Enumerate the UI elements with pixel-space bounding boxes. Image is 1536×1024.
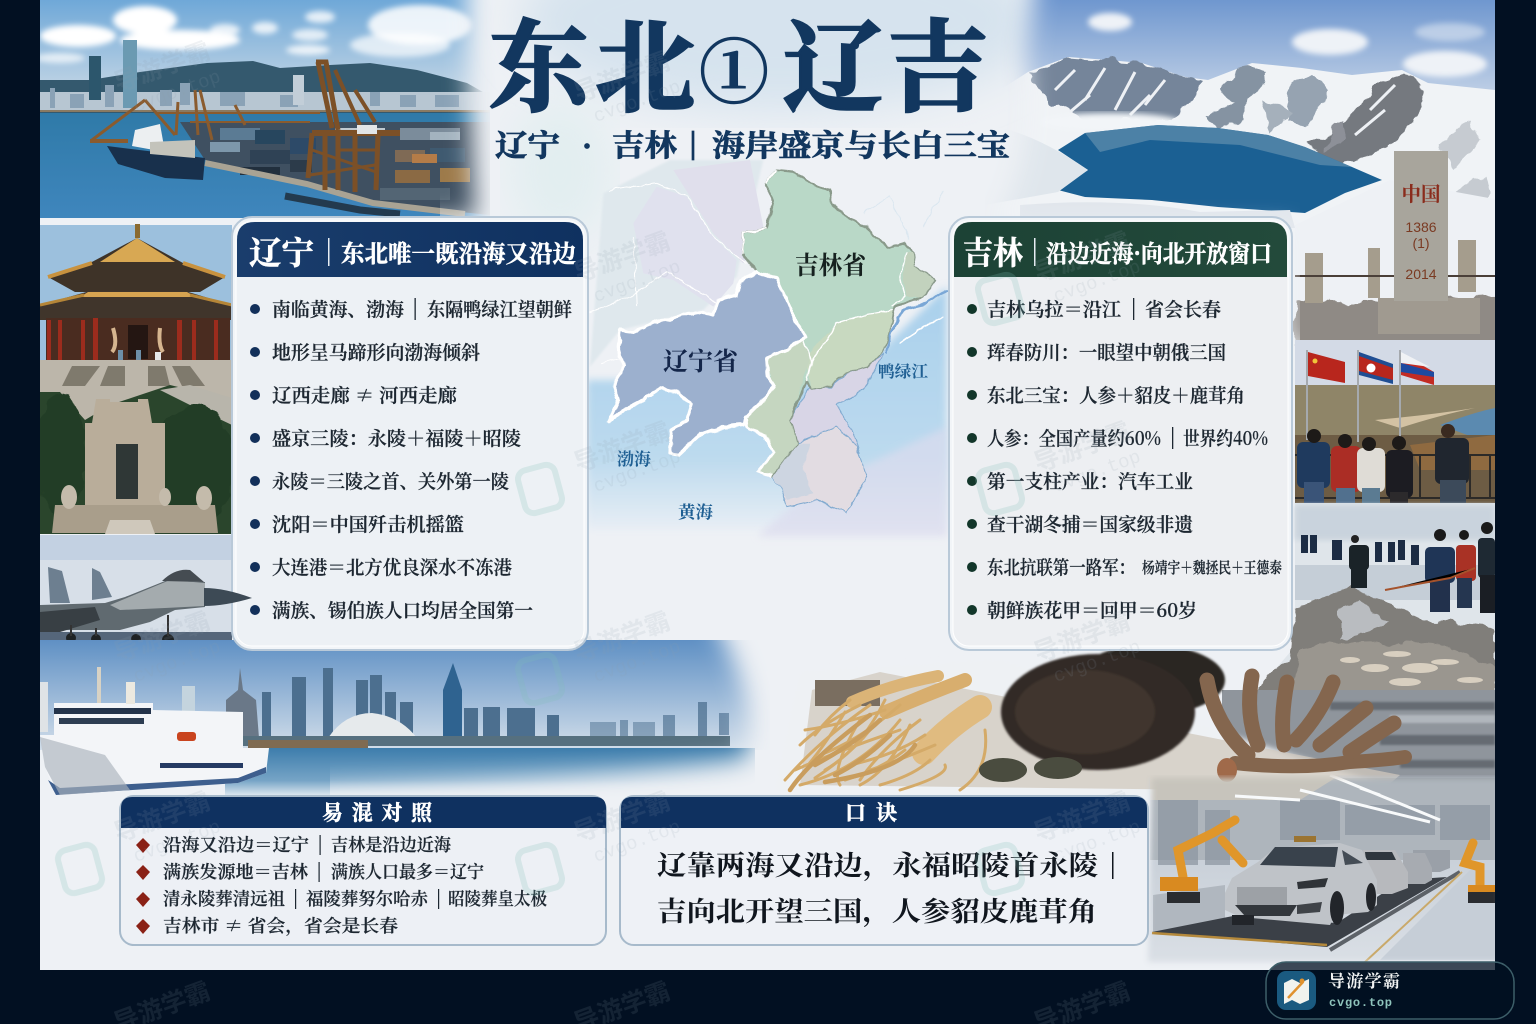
photo: automobile factory line [1140,775,1500,970]
subtitle [495,121,1010,165]
panel: mnemonic [620,796,1148,945]
title: ① [699,17,769,118]
list: Jilin facts: 朝鲜族花甲＝回甲＝60岁 [987,596,1197,623]
ship [107,146,205,180]
watermark pattern: 导游学霸 [570,227,674,288]
photo: Chagan Lake winter fishing [1258,502,1495,690]
list: Jilin facts: 吉林乌拉＝沿江 [987,295,1121,322]
watermark pattern: cvgo.top [130,636,224,688]
list: Jilin facts: 人参：全国产量约60% [987,424,1161,451]
icon: boundary stone China 1386: 2014 [1405,266,1437,282]
list: Jilin facts: 珲春防川：一眼望中朝俄三国 [987,338,1226,365]
watermark pattern: 导游学霸 [110,37,214,98]
list: easily confused items: 满族人口最多＝辽宁 [331,859,484,884]
icon: ginseng [785,676,986,790]
icon: boundary stone China 1386: 中国 [1402,178,1440,207]
list: easily confused items: 吉林市 ≠ 省会，省会是长春 [163,913,399,938]
footer badge [1266,962,1514,1019]
list: Jilin facts: 东北抗联第一路军： [987,553,1135,580]
cars [1413,850,1450,872]
watermark pattern: 导游学霸 [1030,417,1134,478]
jet nose overlapping panel [204,588,252,606]
panel: easily confused [120,796,606,945]
watermark pattern: cvgo.top [130,816,224,868]
list: easily confused items [136,832,547,938]
photo: factory overhead section [1222,690,1495,790]
icon: boundary stone China 1386: 1386 [1405,219,1437,235]
list: Liaoning facts: 沈阳＝中国歼击机摇篮 [272,510,464,537]
gantry crane [308,62,400,192]
header: easily confused [121,797,606,828]
watermark pattern: cvgo.top [590,76,684,128]
icon: boundary stone China 1386 [1394,151,1448,301]
map label: Yellow Sea: 黄海 [678,498,713,523]
header: Jilin: 沿边近海·向北开放窗口 [1046,234,1272,269]
map label: Yalu River: 鸭绿江 [878,359,928,382]
subtitle: 吉林 [612,121,677,165]
watermark pattern: 导游学霸 [110,607,214,668]
robot arms [1178,820,1480,887]
list: Liaoning facts: 东隔鸭绿江望朝鲜 [427,295,572,322]
Liaoning province [608,272,807,455]
icon: map logo [1277,971,1316,1010]
map label: Jilin: 吉林省 [795,246,867,282]
footer badge: cvgo.top [1329,996,1392,1010]
watermark pattern: 导游学霸 [110,787,214,848]
list: Jilin facts: 查干湖冬捕＝国家级非遗 [987,510,1193,537]
list: Liaoning facts [250,295,572,623]
watermark pattern: cvgo.top [590,816,684,868]
header: mnemonic [621,797,1147,828]
list: Liaoning facts: 盛京三陵：永陵＋福陵＋昭陵 [272,424,521,451]
watermark pattern: cvgo.top [590,636,684,688]
list: easily confused items: 吉林是沿边近海 [331,832,451,857]
list: Jilin facts: 东北三宝：人参＋貂皮＋鹿茸角 [987,381,1245,408]
photo: J-15 fighter jet [40,535,232,650]
map label: Bohai Sea: 渤海 [617,445,651,470]
list: Liaoning facts: 南临黄海、渤海 [272,295,404,322]
photo: snow mountain Changbai crater lake [985,0,1500,345]
header: easily confused: 易混对照 [322,797,434,827]
text: mnemonic verse: 吉向北开望三国，人参貂皮鹿茸角 [657,890,1097,929]
list: Liaoning facts: 永陵＝三陵之首、关外第一陵 [272,467,509,494]
Jilin province [742,170,935,477]
footer badge: 导游学霸 [1328,967,1400,992]
watermark pattern: cvgo.top [590,446,684,498]
icon: antler [1207,676,1405,766]
map: Liaoning and Jilin provinces [587,160,948,537]
photo: Dalian harbour and container port [35,0,500,218]
watermark pattern: 导游学霸 [570,607,674,668]
text: mnemonic verse: 辽靠两海又沿边，永福昭陵首永陵 [657,844,1098,883]
watermark pattern: 导游学霸 [1030,607,1134,668]
list: easily confused items: 清永陵葬清远祖 [163,886,285,911]
list: Jilin facts: 第一支柱产业：汽车工业 [987,467,1193,494]
watermark pattern: 导游学霸 [570,47,674,108]
photo: Hunchun three-nation viewpoint [1295,340,1495,514]
list: easily confused items: 昭陵葬皇太极 [448,886,547,911]
icon: flags [1307,350,1434,442]
ferry [40,703,269,784]
watermark pattern [56,37,1144,1024]
photo: Shenyang stone stele tomb [34,385,235,534]
photo: Dalian skyline ferry [30,640,770,798]
North Korea region [790,353,883,453]
icon: fur pelt [1001,645,1225,770]
watermark pattern: cvgo.top [590,256,684,308]
list: Liaoning facts: 大连港＝北方优良深水不冻港 [272,553,512,580]
header: Jilin: 吉林 [963,228,1023,274]
header: Liaoning: 东北唯一既沿海又沿边 [341,234,576,269]
people at railing [1297,424,1469,503]
panel: Jilin [949,217,1292,650]
list: Jilin facts: 世界约40% [1183,424,1268,451]
header: Jilin [954,222,1287,277]
list: Jilin facts: 杨靖宇＋魏拯民＋王德泰 [1142,556,1282,578]
list: easily confused items: 满族发源地＝吉林 [163,859,309,884]
list: Liaoning facts: 地形呈马蹄形向渤海倾斜 [272,338,480,365]
watermark pattern: 导游学霸 [1030,787,1134,848]
watermark pattern: 导游学霸 [570,787,674,848]
photo: northeast three treasures [775,645,1405,800]
text: mnemonic verse [657,844,1114,929]
header: mnemonic: 口诀 [845,797,897,827]
list: easily confused items: 沿海又沿边＝辽宁 [163,832,309,857]
South Korea region [772,427,867,513]
header: Liaoning: 辽宁 [249,228,314,274]
header: Liaoning [237,222,583,277]
subtitle: 辽宁 [495,121,560,165]
photo: Zhaoling palace pavilion [40,224,232,425]
watermark pattern: cvgo.top [1050,636,1144,688]
list: Jilin facts: 省会长春 [1145,295,1221,322]
watermark pattern: 导游学霸 [570,417,674,478]
watermark pattern: cvgo.top [1050,446,1144,498]
list: Liaoning facts: 辽西走廊 ≠ 河西走廊 [272,381,457,408]
icon: boundary stone China 1386: (1) [1412,235,1430,251]
subtitle: 海岸盛京与长白三宝 [712,121,1010,165]
list: Jilin facts [967,295,1282,623]
panel: Liaoning [232,217,588,650]
list: Liaoning facts: 满族、锡伯族人口均居全国第一 [272,596,533,623]
map label: Liaoning: 辽宁省 [663,342,739,378]
watermark pattern: cvgo.top [130,66,224,118]
watermark pattern: cvgo.top [1050,816,1144,868]
watermark pattern: cvgo.top [1050,256,1144,308]
list: easily confused items: 福陵葬努尔哈赤 [306,886,429,911]
watermark pattern: 导游学霸 [1030,227,1134,288]
